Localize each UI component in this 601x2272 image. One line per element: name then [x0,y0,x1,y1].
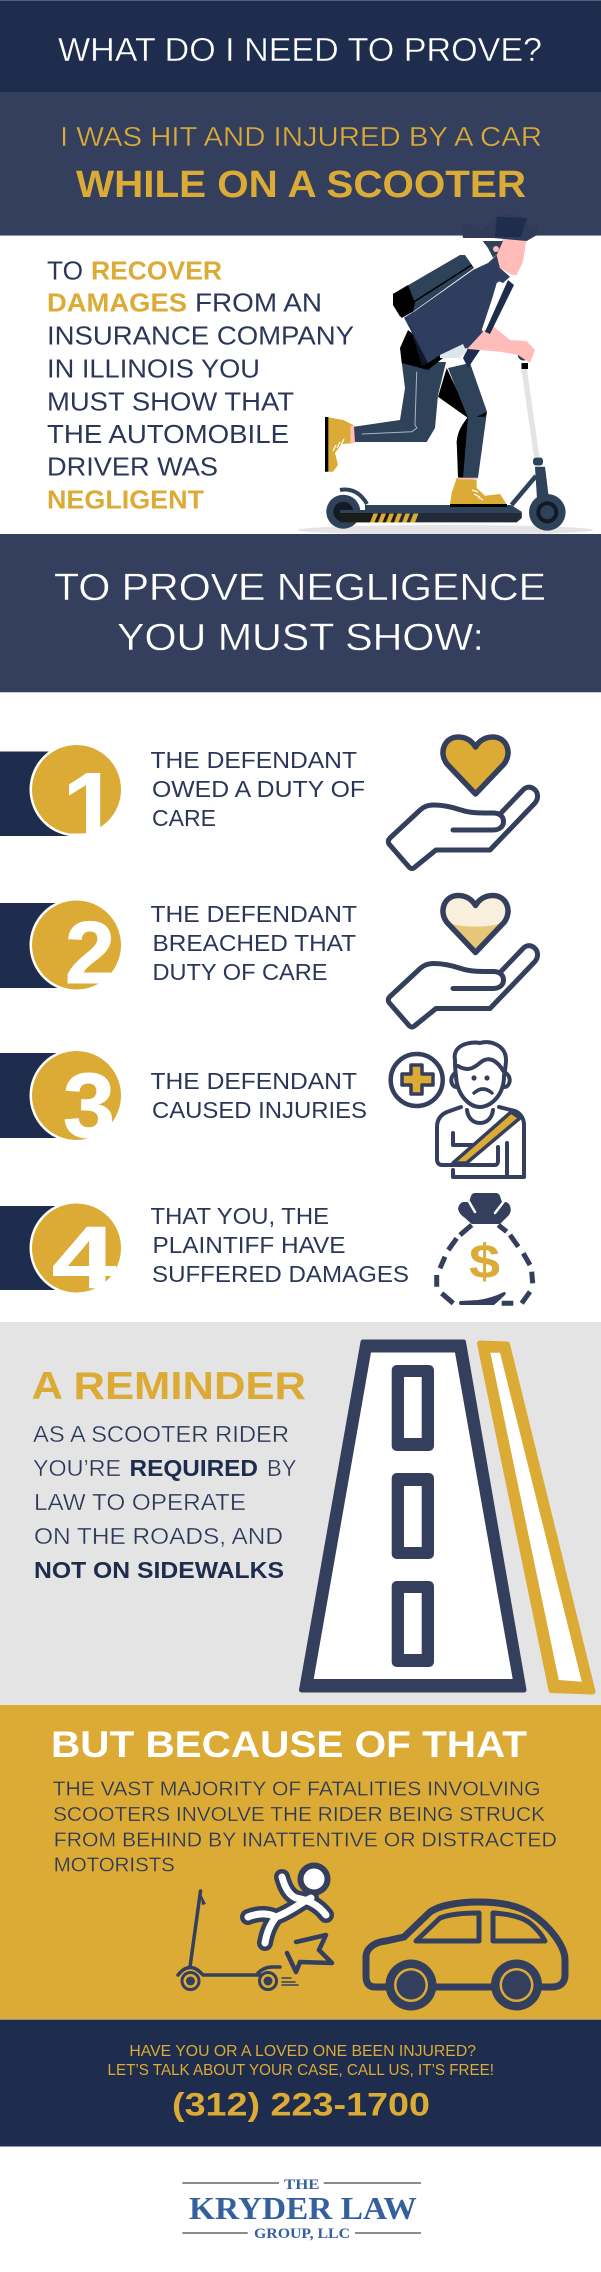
panel: prove negligence band: YOU MUST SHOW: [117,617,484,659]
phone number: (312) 223-1700 [172,2086,430,2122]
logo: the kryder law group: THE [284,2177,320,2193]
icon: impact mark [287,1935,332,1972]
step 4 text: PLAINTIFF HAVE [152,1232,346,1258]
panel: recover damages text: RECOVER [91,256,222,286]
panel: prove negligence band [0,534,601,693]
panel: recover damages text: MUST SHOW THAT [47,386,294,416]
step 3 badge [0,1048,124,1157]
panel: recover damages text: DAMAGES [47,288,187,318]
step 1 text: OWED A DUTY OF [152,776,365,802]
step 3 badge: 3 [63,1055,115,1157]
panel: recover damages text [47,256,354,514]
step 4 badge [0,1201,124,1307]
heading: what do I need to prove: WHAT DO I NEED TO PROVE? [58,31,542,68]
cta text: LET’S TALK ABOUT YOUR CASE, CALL US, IT’S FREE! [108,2062,494,2079]
step 2 text: THE DEFENDANT [150,901,357,927]
step 4 text [150,1203,409,1287]
panel: call to action [0,2019,601,2147]
step 3 text: CAUSED INJURIES [152,1097,367,1123]
step 4 badge: 4 [52,1208,116,1307]
panel: recover damages text: DRIVER WAS [47,452,218,482]
step 2 text: DUTY OF CARE [152,959,328,985]
step 2 badge [0,898,124,1002]
step 1 badge: 1 [62,751,119,866]
logo: the kryder law group: KRYDER LAW [189,2190,417,2226]
panel: recover damages text: TO [47,256,83,286]
fatalities text: SCOOTERS INVOLVE THE RIDER BEING STRUCK [53,1803,545,1826]
panel: recover damages text: THE AUTOMOBILE [47,419,289,449]
fatalities text [53,1778,557,1877]
fatalities text: FROM BEHIND BY INATTENTIVE OR DISTRACTED [54,1829,557,1852]
heading: but because of that: BUT BECAUSE OF THAT [51,1724,527,1765]
icon: road [302,1342,524,1690]
icon: money bag [437,1193,533,1305]
heading: a reminder: A REMINDER [32,1365,306,1408]
step 1 text: THE DEFENDANT [150,747,357,773]
reminder text: ON THE ROADS, AND [34,1523,283,1549]
icon: falling person [248,1866,328,1943]
step 3 text [150,1068,367,1123]
panel: title band [0,0,601,92]
heading: while on a scooter: WHILE ON A SCOOTER [76,164,526,206]
panel: recover damages text: FROM AN [195,288,322,318]
subheading: hit by a car: I WAS HIT AND INJURED BY A CAR [60,121,542,152]
panel: scooter headline band [0,92,601,236]
step 4 text: SUFFERED DAMAGES [152,1261,409,1287]
fatalities text: THE VAST MAJORITY OF FATALITIES INVOLVING [53,1778,541,1801]
panel: reminder [0,1322,601,1705]
icon: hand with fading heart [388,896,538,1027]
dollar sign: $ [469,1236,500,1289]
icon: scooter [178,1891,298,1990]
reminder text: YOU’RE [33,1455,121,1481]
panel: but because of that [0,1705,601,2019]
illustration: rider on scooter [298,213,594,535]
panel: recover damages text: INSURANCE COMPANY [47,320,354,350]
cta text: HAVE YOU OR A LOVED ONE BEEN INJURED? [129,2043,476,2060]
reminder text: LAW TO OPERATE [34,1489,246,1515]
step 4 text: THAT YOU, THE [150,1203,329,1229]
logo: the kryder law group: GROUP, LLC [254,2226,350,2242]
icon: sidewalk [480,1344,592,1692]
logo: the kryder law group [182,2177,421,2242]
icon: injured person with sling [391,1042,524,1177]
panel: recover damages text: IN ILLINOIS YOU [47,354,260,384]
step 2 text [150,901,357,985]
reminder text: BY [267,1455,297,1481]
step 2 text: BREACHED THAT [152,930,356,956]
step 1 text [150,747,365,831]
reminder text: REQUIRED [130,1455,258,1481]
reminder text: AS A SCOOTER RIDER [33,1421,289,1447]
cta text [108,2043,494,2079]
icon: hand with gold heart [388,737,538,868]
step 1 badge [0,742,124,866]
panel: recover damages text: NEGLIGENT [47,484,204,514]
step 1 text: CARE [152,805,216,831]
reminder text [33,1421,297,1583]
heading: to prove negligence: TO PROVE NEGLIGENCE [54,567,546,609]
step 3 text: THE DEFENDANT [150,1068,357,1094]
fatalities text: MOTORISTS [54,1854,175,1877]
step 2 badge: 2 [65,903,115,1002]
reminder text: NOT ON SIDEWALKS [34,1557,284,1583]
icon: car [366,1902,565,2010]
